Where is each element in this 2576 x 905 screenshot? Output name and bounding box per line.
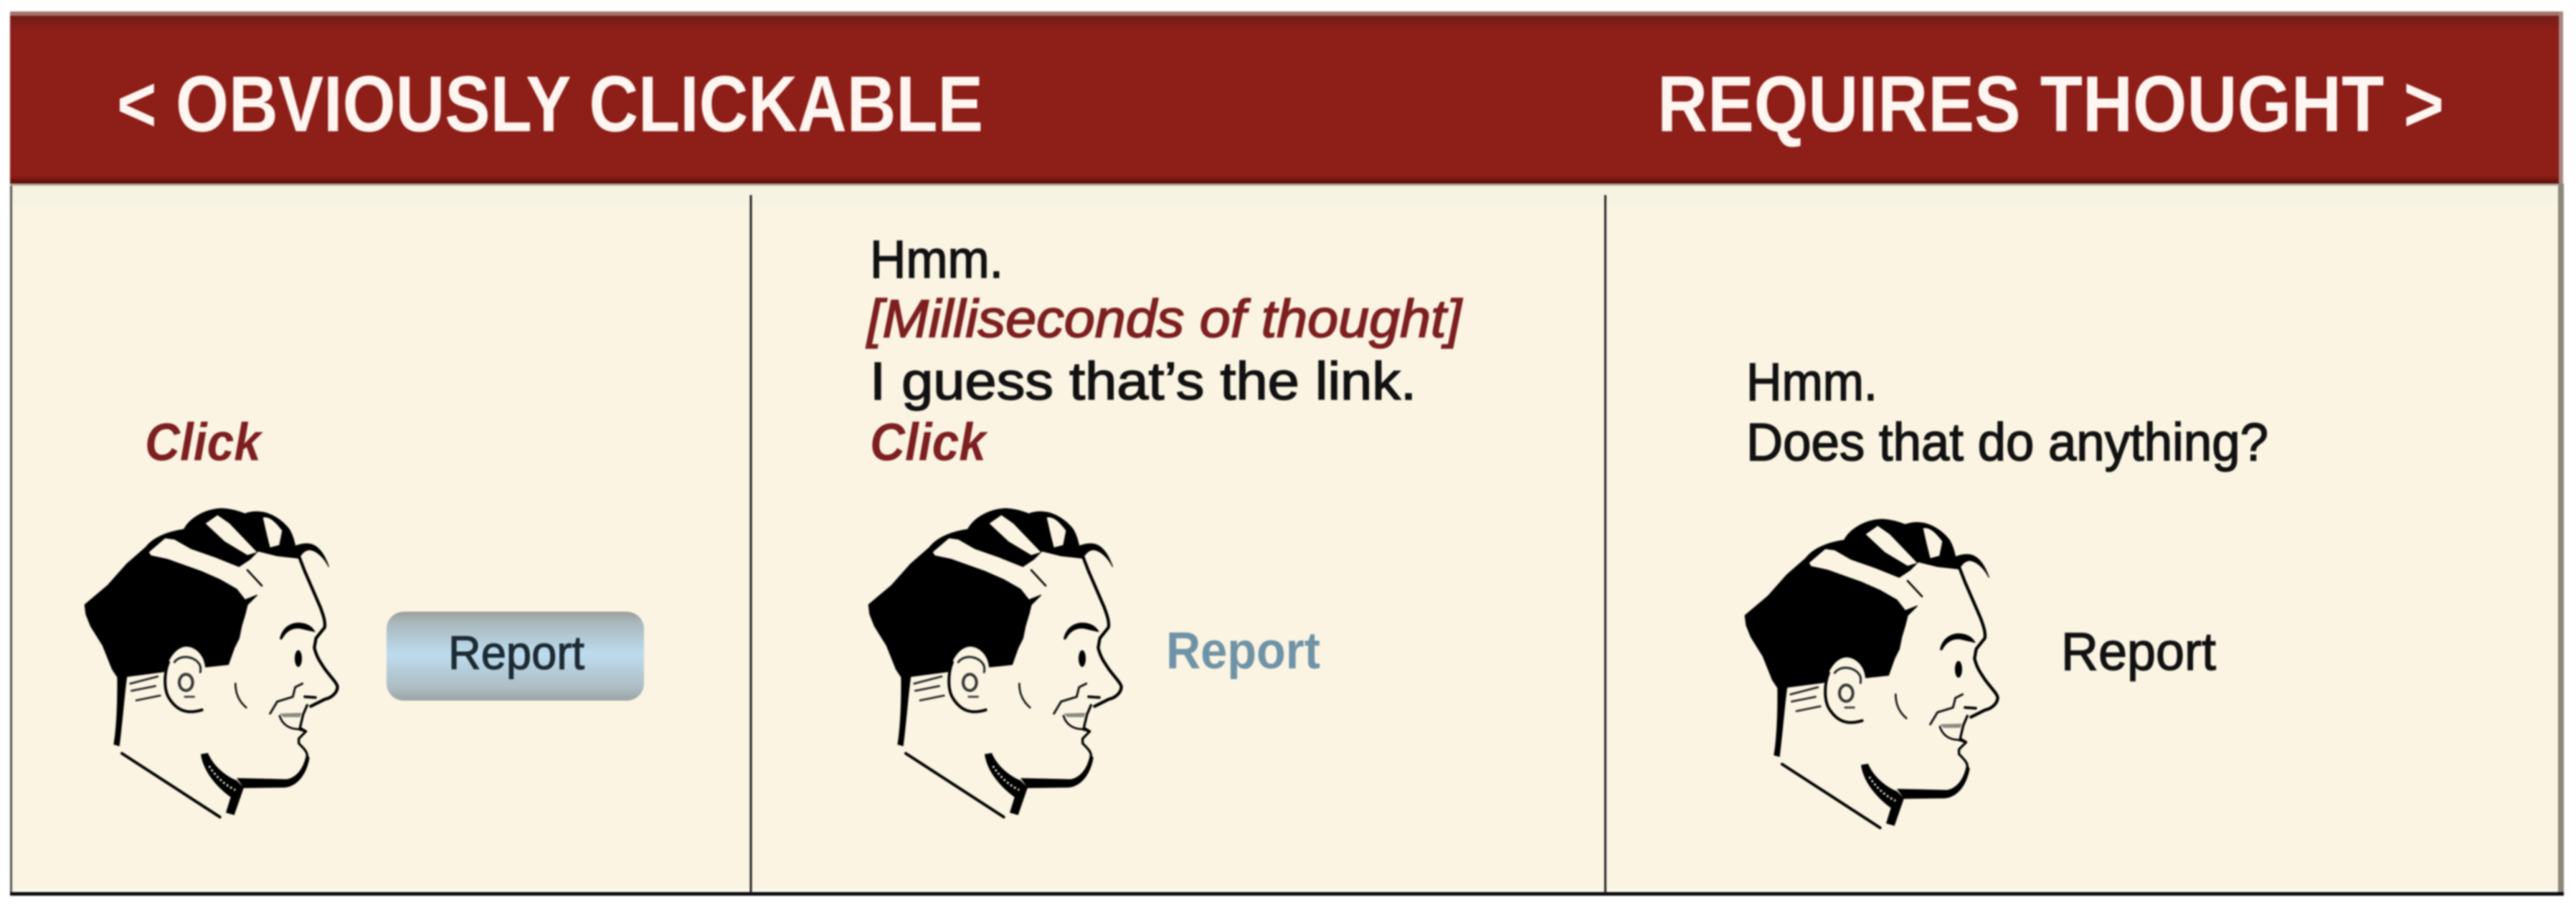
heading: obviously clickable: < OBVIOUSLY CLICKABLE [117, 60, 983, 148]
panel: requires thought column [1745, 352, 2268, 828]
text link: report: Report [1166, 622, 1320, 680]
panel: milliseconds of thought column [866, 229, 1463, 817]
button: report [387, 612, 644, 701]
text: milliseconds of thought: [Milliseconds of thought] [866, 289, 1463, 349]
icon: thinking head [868, 508, 1122, 817]
heading: requires thought: REQUIRES THOUGHT > [1657, 60, 2444, 148]
text: hmm: Hmm. [1746, 352, 1877, 412]
text: hmm: Hmm. [870, 229, 1003, 289]
plain text: report: Report [2061, 622, 2216, 681]
button label: Report [448, 626, 584, 679]
text: click: Click [145, 412, 264, 472]
text: does that do anything: Does that do anything? [1746, 412, 2268, 472]
column divider 1 [750, 195, 752, 893]
header banner [10, 11, 2563, 186]
icon: thinking head [85, 508, 338, 817]
icon: thinking head [1745, 519, 1998, 828]
text: i guess: I guess that’s the link. [870, 351, 1416, 411]
column divider 2 [1604, 195, 1606, 893]
text: click: Click [870, 412, 989, 472]
panel: obviously clickable column [85, 412, 644, 817]
